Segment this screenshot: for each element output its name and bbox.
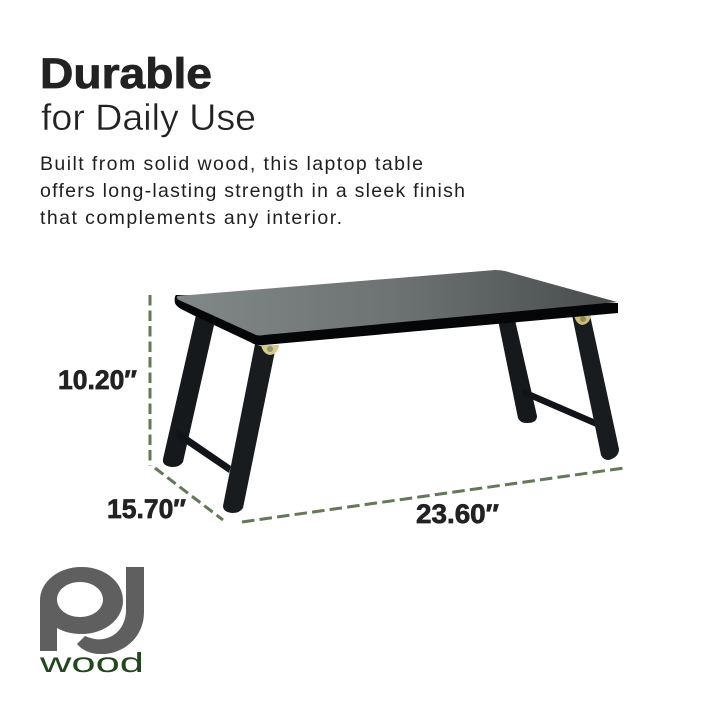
text block: description: Built from solid wood, this laptop table	[40, 153, 423, 175]
logo	[38, 567, 144, 678]
table top surface	[177, 270, 617, 336]
dimension: height line	[148, 295, 152, 466]
label: width: 23.60″	[416, 499, 499, 529]
bracket: right hinge	[574, 315, 591, 325]
heading: for Daily Use: for Daily Use	[41, 97, 256, 138]
front left leg	[223, 344, 275, 513]
title	[40, 50, 256, 138]
right brace	[522, 388, 596, 427]
back right leg	[498, 320, 537, 423]
text block: description	[40, 153, 465, 229]
text block: description: that complements any interior.	[40, 207, 342, 229]
front right leg	[572, 315, 619, 460]
label: depth: 15.70″	[107, 494, 186, 524]
dimension: depth line	[155, 468, 223, 520]
heading: Durable: Durable	[40, 50, 212, 98]
back left leg	[163, 315, 214, 467]
text block: description: offers long-lasting strength in a sleek finish	[40, 180, 465, 202]
dimension: width line	[242, 468, 624, 522]
table illustration	[163, 270, 619, 513]
logo mark: pj	[40, 567, 144, 654]
left brace	[176, 429, 231, 473]
label: height: 10.20″	[58, 365, 137, 395]
bracket: left hinge	[261, 345, 279, 355]
table edge	[175, 295, 618, 345]
logo wordmark: wood: wood	[38, 647, 144, 678]
